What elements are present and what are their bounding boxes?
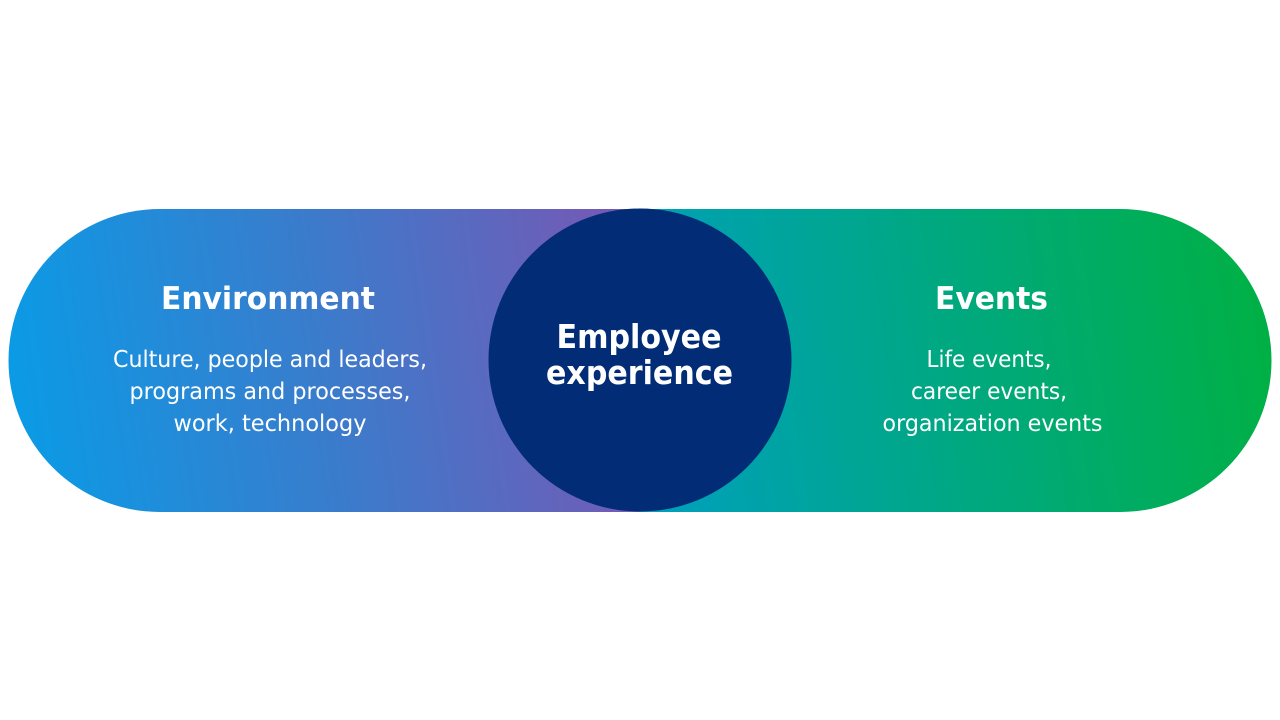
heading: events: Events <box>935 281 1048 317</box>
heading: environment: Environment <box>161 281 375 317</box>
text: environment details: programs and processes, <box>130 379 410 405</box>
text: environment details <box>113 347 427 437</box>
text: events details: Life events, <box>926 347 1052 373</box>
text: events details: career events, <box>911 379 1067 405</box>
text: environment details: Culture, people and leaders, <box>113 347 427 373</box>
text: events details <box>882 347 1102 437</box>
text: environment details: work, technology <box>174 411 366 437</box>
center circle: employee experience <box>488 208 792 512</box>
center circle: employee experience: Employee <box>556 317 722 356</box>
center circle: employee experience: experience <box>546 353 733 392</box>
panel: events <box>640 209 1272 512</box>
text: events details: organization events <box>882 411 1102 437</box>
panel: environment <box>8 209 640 512</box>
